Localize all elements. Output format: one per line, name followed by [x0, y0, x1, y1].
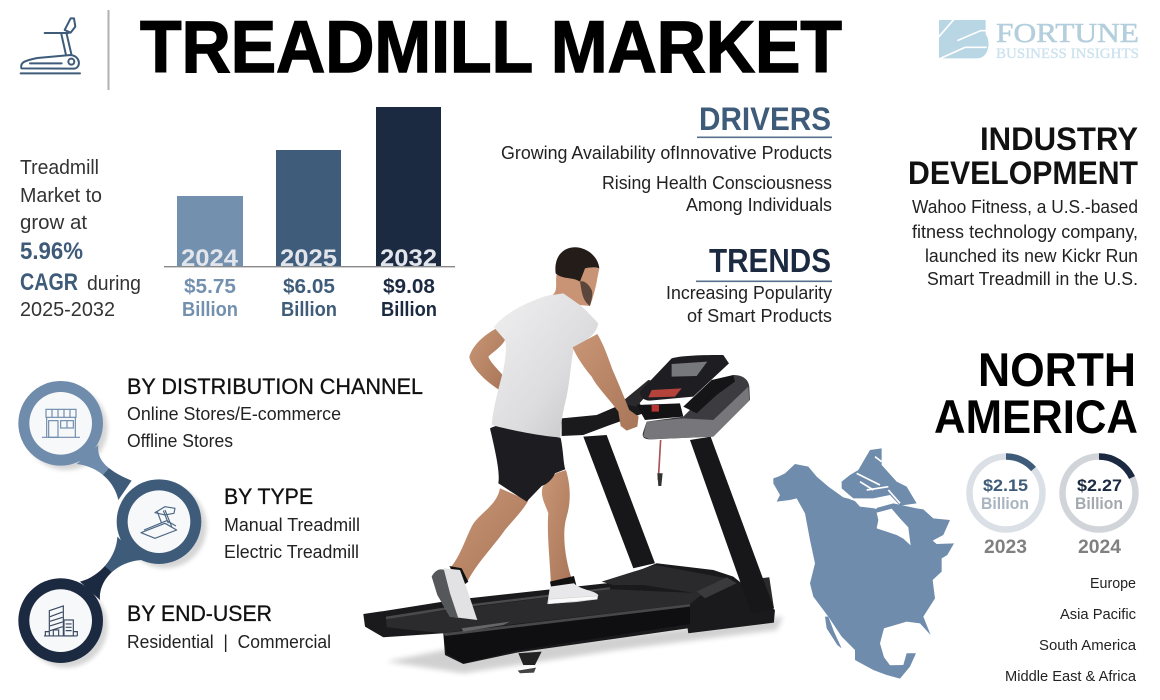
- circle: end-user: [18, 578, 103, 663]
- donut 2023: 2023: [984, 537, 1027, 558]
- donut 2023: $2.15: [983, 476, 1028, 495]
- north america heading: NORTH: [978, 343, 1136, 396]
- circle: type: [117, 479, 201, 564]
- logo: Fortune Business Insights: BUSINESS INSIGHTS: [996, 46, 1139, 62]
- logo: Fortune Business Insights: [938, 18, 1139, 62]
- segment connector graphic: [18, 381, 207, 668]
- bar chart: 2032: [380, 245, 437, 272]
- runner shorts: [490, 425, 565, 502]
- segment text: by end-user: [127, 601, 331, 652]
- title: TREADMILL MARKET: [140, 7, 842, 88]
- industry development: INDUSTRY: [980, 121, 1138, 157]
- CAGR text block: CAGR: [20, 269, 78, 296]
- runner back leg: [450, 488, 528, 582]
- trends: of Smart Products: [687, 306, 832, 326]
- connector bottom: [80, 537, 142, 600]
- logo: Fortune Business Insights: FORTUNE: [996, 18, 1139, 48]
- segment text: by type: BY TYPE: [224, 484, 313, 509]
- segment text: by type: Electric Treadmill: [224, 542, 359, 562]
- runner beard: [580, 281, 592, 306]
- header divider: [108, 10, 110, 90]
- header treadmill icon: [21, 18, 80, 73]
- drivers: Rising Health Consciousness: [602, 173, 832, 193]
- segment text: by type: Manual Treadmill: [224, 515, 360, 535]
- drivers: Growing Availability ofInnovative Products: [501, 143, 832, 163]
- runner far arm: [469, 327, 505, 390]
- donut 2023: [970, 456, 1042, 558]
- segment text: by distribution channel: BY DISTRIBUTION CHANNEL: [127, 374, 423, 399]
- industry development: launched its new Kickr Run: [925, 246, 1138, 266]
- bar chart: 2025: [280, 245, 337, 272]
- CAGR text block: during: [87, 273, 141, 295]
- runner shirt: [492, 293, 598, 437]
- treadmill uprights: [583, 435, 774, 614]
- industry development: Smart Treadmill in the U.S.: [927, 269, 1138, 289]
- CAGR text block: 2025-2032: [20, 299, 115, 321]
- drivers: DRIVERS: [699, 101, 831, 137]
- trends: Increasing Popularity: [666, 283, 832, 303]
- shoes: [432, 566, 598, 620]
- runner front leg: [542, 470, 573, 585]
- runner near arm: [573, 334, 639, 431]
- industry development: DEVELOPMENT: [908, 155, 1138, 191]
- segment text: by distribution channel: [127, 374, 423, 451]
- other regions list: South America: [1039, 637, 1137, 654]
- donut 2024: [1062, 456, 1136, 558]
- bar chart: 2024: [181, 245, 239, 272]
- other regions list: Middle East & Africa: [1005, 668, 1137, 685]
- icon: building: [44, 606, 77, 636]
- CAGR text block: grow at: [20, 212, 87, 234]
- industry development: [908, 121, 1138, 289]
- runner on treadmill photo: [363, 247, 783, 673]
- donut 2024: Billion: [1075, 494, 1123, 513]
- trends: TRENDS: [709, 242, 831, 279]
- segment text: by end-user: Residential | Commercial: [127, 632, 331, 652]
- donut 2023: Billion: [981, 494, 1029, 513]
- CAGR text block: 5.96%: [20, 238, 83, 265]
- bar chart: Billion: [281, 299, 337, 321]
- bar chart: $6.05: [283, 276, 335, 298]
- icon: store: [42, 409, 80, 437]
- icon: treadmill: [141, 507, 177, 538]
- floor shadow: [387, 617, 783, 673]
- drivers: Among Individuals: [686, 195, 832, 215]
- drivers: [501, 101, 832, 215]
- industry development: fitness technology company,: [912, 222, 1138, 242]
- segment text: by type: [224, 484, 360, 562]
- bar chart: $5.75: [184, 276, 236, 298]
- console and handlebars: [562, 355, 750, 486]
- segment text: by distribution channel: Online Stores/E-commerce: [127, 404, 341, 424]
- other regions list: [1005, 575, 1137, 685]
- connector top: [77, 445, 132, 500]
- map: North America: [773, 448, 954, 679]
- donut 2024: $2.27: [1077, 476, 1122, 495]
- north america heading: AMERICA: [934, 390, 1138, 443]
- bar chart: Billion: [182, 299, 238, 321]
- segment text: by end-user: BY END-USER: [127, 601, 272, 626]
- donut 2024: 2024: [1078, 537, 1121, 558]
- industry development: Wahoo Fitness, a U.S.-based: [912, 197, 1138, 217]
- shadows: [24, 387, 207, 668]
- treadmill feet and rear parts: [518, 577, 774, 673]
- CAGR text block: Treadmill: [20, 157, 99, 179]
- bar chart: $9.08: [383, 276, 435, 298]
- north america heading: [934, 343, 1138, 443]
- CAGR text block: Market to: [20, 185, 102, 207]
- other regions list: Asia Pacific: [1060, 606, 1136, 623]
- runner hair: [555, 247, 599, 282]
- trends: [666, 242, 832, 326]
- CAGR text block: [20, 157, 141, 321]
- circle: distribution channel: [18, 381, 103, 466]
- bar chart: Billion: [381, 299, 437, 321]
- bar chart: [164, 107, 455, 321]
- other regions list: Europe: [1090, 575, 1136, 592]
- runner neck and face: [553, 263, 599, 306]
- treadmill deck: [363, 563, 775, 664]
- segment text: by distribution channel: Offline Stores: [127, 431, 233, 451]
